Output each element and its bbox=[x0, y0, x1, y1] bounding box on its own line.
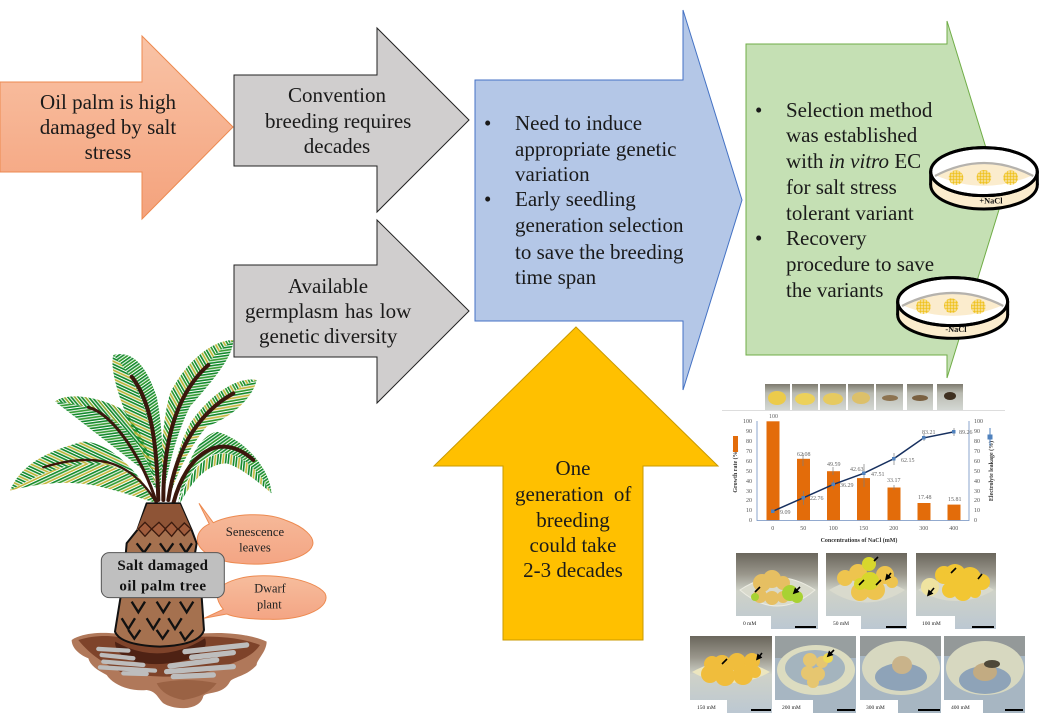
y axis right: 30 bbox=[974, 489, 980, 495]
photo: 50 mM bbox=[826, 553, 907, 629]
arrow: selection method and recovery: • bbox=[755, 98, 762, 122]
arrow: available germplasm: Available bbox=[288, 274, 368, 298]
arrow: one generation of breeding: 2-3 decades bbox=[523, 558, 623, 582]
data labels: 100 bbox=[769, 414, 778, 420]
y axis right: 60 bbox=[974, 459, 980, 465]
illustration: salt damaged oil palm tree bbox=[10, 340, 326, 708]
y axis right bbox=[974, 419, 983, 524]
photo: 100 mM bbox=[916, 553, 996, 629]
data labels: 15.81 bbox=[948, 497, 962, 503]
arrow: selection method and recovery: was established bbox=[786, 123, 918, 147]
legends bbox=[733, 436, 738, 452]
y axis left: 60 bbox=[746, 459, 752, 465]
y axis left: 90 bbox=[746, 429, 752, 435]
arrow: oil palm salt stress bbox=[0, 36, 233, 219]
data labels: 62.08 bbox=[797, 452, 810, 458]
y axis left: 70 bbox=[746, 449, 752, 455]
chart: growth rate and electrolyte leakage vs NaCl: Concentrations of NaCl (mM) bbox=[821, 537, 897, 544]
callout: dwarf plant: plant bbox=[257, 598, 282, 612]
y axis left: 40 bbox=[746, 479, 752, 485]
salt patches bbox=[98, 645, 247, 677]
photo: 0 mM bbox=[736, 553, 818, 629]
data labels: 33.17 bbox=[887, 478, 900, 484]
label: salt damaged oil palm tree: oil palm tree bbox=[119, 579, 206, 595]
arrow: genetic variation and early selection: variation bbox=[515, 162, 590, 186]
y axis left: 30 bbox=[746, 489, 752, 495]
callout: senescence leaves: Senescence bbox=[226, 525, 285, 539]
arrow: one generation of breeding: generation of bbox=[515, 482, 631, 506]
rachises bbox=[43, 365, 253, 503]
fronds bbox=[10, 340, 272, 507]
callout: dwarf plant bbox=[204, 576, 326, 619]
arrow: genetic variation and early selection: • bbox=[484, 187, 491, 211]
x axis labels: 100 bbox=[829, 526, 838, 532]
label: salt damaged oil palm tree: Salt damaged bbox=[117, 558, 209, 574]
y axis right: 10 bbox=[974, 508, 980, 514]
arrow: genetic variation and early selection: to save the breeding bbox=[515, 240, 684, 264]
label: salt damaged oil palm tree bbox=[101, 553, 224, 598]
arrow: convention breeding bbox=[234, 28, 469, 212]
y axis left: 50 bbox=[746, 469, 752, 475]
data labels: 83.21 bbox=[922, 430, 936, 436]
arrow: selection method and recovery: for salt stress bbox=[786, 175, 897, 199]
arrow: available germplasm: genetic diversity bbox=[259, 324, 398, 348]
photo: 150 mM: 150 mM bbox=[697, 705, 716, 711]
x axis labels: 0 bbox=[771, 526, 774, 532]
data labels: 62.15 bbox=[901, 458, 914, 464]
y axis right: 50 bbox=[974, 469, 980, 475]
x axis labels: 400 bbox=[949, 526, 958, 532]
y axis right: 40 bbox=[974, 479, 980, 485]
y axis right: 100 bbox=[974, 419, 983, 425]
y axis right: 70 bbox=[974, 449, 980, 455]
photo: 100 mM: 100 mM bbox=[922, 621, 941, 627]
callout: dwarf plant: Dwarf bbox=[254, 582, 287, 596]
data labels: 36.29 bbox=[840, 483, 854, 489]
arrow: selection method and recovery: Selection method bbox=[786, 98, 933, 122]
arrow: selection method and recovery: the variants bbox=[786, 278, 883, 302]
photo: 200 mM: 200 mM bbox=[782, 705, 801, 711]
arrow: one generation of breeding bbox=[434, 327, 718, 640]
y axis left: 80 bbox=[746, 439, 752, 445]
arrow: genetic variation and early selection bbox=[475, 10, 742, 390]
arrow: selection method and recovery: with in vitro EC bbox=[786, 149, 921, 173]
data labels: 49.59 bbox=[827, 462, 840, 468]
photo: 300 mM bbox=[860, 636, 941, 713]
arrow: convention breeding: decades bbox=[304, 134, 370, 158]
data labels: 9.09 bbox=[780, 510, 790, 516]
data labels: 89.26 bbox=[959, 430, 972, 436]
arrow: genetic variation and early selection: time span bbox=[515, 265, 597, 289]
chart: growth rate and electrolyte leakage vs NaCl bbox=[732, 414, 995, 544]
arrow: one generation of breeding: breeding bbox=[536, 508, 610, 532]
arrow: one generation of breeding: One bbox=[556, 456, 590, 480]
photo: 0 mM: 0 mM bbox=[743, 621, 756, 627]
arrow: available germplasm: germplasm has low bbox=[245, 299, 412, 323]
arrow: oil palm salt stress: stress bbox=[85, 140, 131, 164]
y axis left bbox=[743, 419, 752, 524]
y axis right: 90 bbox=[974, 429, 980, 435]
arrow: oil palm salt stress: Oil palm is high bbox=[40, 90, 176, 114]
bars: growth rate bbox=[766, 421, 960, 520]
photo: 200 mM bbox=[775, 636, 856, 713]
y axis left: 0 bbox=[749, 518, 752, 524]
arrow: selection method and recovery: tolerant variant bbox=[786, 201, 914, 225]
y axis right: 80 bbox=[974, 439, 980, 445]
callout: senescence leaves bbox=[197, 503, 313, 564]
arrow: genetic variation and early selection: • bbox=[484, 111, 491, 135]
photo strip: callus thumbnails bbox=[722, 384, 1005, 410]
petri dish: -NaCl bbox=[898, 278, 1008, 338]
x axis labels: 200 bbox=[889, 526, 898, 532]
photo: 50 mM: 50 mM bbox=[833, 621, 849, 627]
arrow: one generation of breeding: could take bbox=[530, 533, 616, 557]
arrow: available germplasm bbox=[234, 220, 469, 403]
y axis left: 100 bbox=[743, 419, 752, 425]
trunk bbox=[115, 503, 204, 647]
chart: growth rate and electrolyte leakage vs NaCl: Growth rate (%) bbox=[732, 449, 739, 493]
data labels bbox=[769, 414, 972, 516]
arrow: genetic variation and early selection: Need to induce bbox=[515, 111, 642, 135]
chart: growth rate and electrolyte leakage vs NaCl: Electrolyte leakage (%) bbox=[988, 441, 995, 501]
photo: 300 mM: 300 mM bbox=[866, 705, 885, 711]
y axis left: 10 bbox=[746, 508, 752, 514]
petri dish: +NaCl bbox=[931, 148, 1037, 209]
arrow: selection method and recovery: • bbox=[755, 226, 762, 250]
y axis right: 0 bbox=[974, 518, 977, 524]
arrow: convention breeding: breeding requires bbox=[265, 109, 411, 133]
soil bbox=[72, 633, 267, 708]
y axis left: 20 bbox=[746, 498, 752, 504]
arrow: genetic variation and early selection: Early seedling bbox=[515, 187, 636, 211]
arrow: selection method and recovery: procedure to save bbox=[786, 252, 934, 276]
data labels: 42.63 bbox=[850, 467, 864, 473]
photo: 150 mM bbox=[690, 636, 772, 713]
arrow: selection method and recovery bbox=[746, 21, 1002, 378]
x axis labels: 300 bbox=[919, 526, 928, 532]
callout: senescence leaves: leaves bbox=[239, 541, 271, 555]
x axis labels bbox=[771, 526, 958, 532]
photo: 400 mM bbox=[944, 636, 1025, 713]
x axis labels: 150 bbox=[859, 526, 868, 532]
y axis right: 20 bbox=[974, 498, 980, 504]
data labels: 47.51 bbox=[871, 472, 884, 478]
arrow: genetic variation and early selection: generation selection bbox=[515, 213, 684, 237]
data labels: 17.48 bbox=[918, 495, 932, 501]
arrow: selection method and recovery: Recovery bbox=[786, 226, 867, 250]
arrow: genetic variation and early selection: appropriate genetic bbox=[515, 137, 676, 161]
line: electrolyte leakage bbox=[773, 432, 954, 511]
photo: 400 mM: 400 mM bbox=[951, 705, 970, 711]
arrow: oil palm salt stress: damaged by salt bbox=[40, 115, 176, 139]
petri dish: -NaCl: -NaCl bbox=[945, 325, 967, 334]
x axis labels: 50 bbox=[800, 526, 806, 532]
arrow: convention breeding: Convention bbox=[288, 83, 386, 107]
petri dish: +NaCl: +NaCl bbox=[979, 196, 1003, 205]
data labels: 22.76 bbox=[810, 496, 824, 502]
